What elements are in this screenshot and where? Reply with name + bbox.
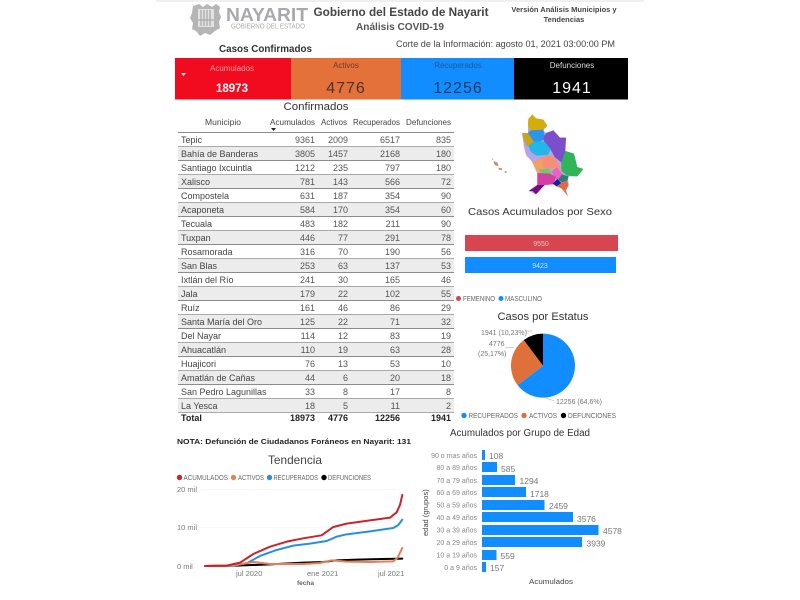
axis labels: 0 mil: [177, 562, 193, 571]
rows: 78: [441, 233, 451, 243]
rows: 354: [385, 191, 400, 201]
card: activos: [291, 58, 401, 100]
rows: Tuxpan: [181, 233, 211, 243]
rows: 12: [338, 331, 348, 341]
rows: 137: [385, 261, 400, 271]
rows: 53: [441, 261, 451, 271]
rows: 6517: [380, 135, 400, 145]
rows: 10: [441, 359, 451, 369]
logo wordmark: NAYARIT: [226, 5, 308, 25]
rows: Jala: [181, 289, 198, 299]
table: municipios: [178, 118, 454, 423]
rows: 63: [338, 261, 348, 271]
line: defunciones: [205, 559, 402, 566]
table heading: Confirmados: [284, 101, 349, 113]
rows: Santa María del Oro: [181, 317, 262, 327]
rows: 179: [300, 289, 315, 299]
rows: Tecuala: [181, 219, 212, 229]
total row: [181, 413, 451, 423]
version note: Tendencias: [544, 15, 584, 24]
rows: Ruíz: [181, 303, 200, 313]
y axis title: edad (grupos): [421, 489, 430, 536]
rows: 60: [441, 205, 451, 215]
legend: sexo: FEMENINO: [463, 294, 495, 303]
rows: 55: [441, 289, 451, 299]
rows: 28: [441, 345, 451, 355]
rows: 797: [385, 163, 400, 173]
group labels: 30 a 39 años: [437, 528, 477, 534]
group labels: 0 a 9 años: [444, 565, 477, 572]
rows: 125: [300, 317, 315, 327]
legend: estatus: [461, 411, 616, 420]
rows: Acaponeta: [181, 205, 224, 215]
rows: Huajicori: [181, 359, 216, 369]
rows: 631: [300, 191, 315, 201]
rows: 3805: [295, 149, 315, 159]
rows: 291: [385, 233, 400, 243]
rows: 19: [338, 345, 348, 355]
rows: Rosamorada: [181, 247, 233, 257]
total row: 1941: [431, 413, 451, 423]
group labels: 50 a 59 años: [437, 502, 477, 510]
pie labels: [478, 330, 602, 406]
value labels: 2459: [549, 501, 568, 511]
axis labels: 20 mil: [177, 485, 197, 494]
rows: [181, 135, 451, 411]
pie labels: 1941 (10,23%): [481, 330, 527, 337]
bar: femenino: 9550: [533, 241, 549, 248]
rows: 18: [305, 401, 315, 411]
bar chart: grupo de edad: [421, 450, 622, 586]
rows: 70: [338, 247, 348, 257]
rows: 13: [338, 359, 348, 369]
rows: 90: [441, 191, 451, 201]
legend: estatus: ACTIVOS: [529, 411, 557, 420]
value labels: 4578: [603, 526, 622, 536]
rows: Compostela: [181, 191, 229, 201]
table header: Acumulados: [270, 118, 315, 127]
card: recuperados: 12256: [433, 80, 483, 97]
rows: San Pedro Lagunillas: [181, 387, 267, 397]
x axis title: Acumulados: [529, 577, 573, 586]
line: recuperados: [205, 520, 402, 566]
top shadow strip: [156, 0, 644, 2]
rows: 114: [301, 331, 315, 341]
legend: sexo: MASCULINO: [505, 294, 542, 303]
header: [190, 4, 617, 55]
rows: 165: [385, 275, 400, 285]
value labels: 3939: [586, 538, 606, 548]
rows: 77: [338, 233, 348, 243]
subtitle: Análisis COVID-19: [356, 21, 444, 33]
axis labels: [177, 485, 404, 587]
bars: [482, 450, 598, 572]
table header: Municipio: [205, 118, 242, 127]
value labels: 1294: [520, 476, 539, 486]
axis labels: fecha: [297, 580, 314, 587]
bar: femenino: [465, 235, 618, 251]
bar chart: sexo: [456, 235, 618, 303]
rows: 2: [446, 401, 451, 411]
rows: 182: [333, 219, 348, 229]
rows: 71: [390, 317, 400, 327]
version note: Versión Análisis Municipios y: [511, 5, 617, 14]
value labels: 585: [501, 464, 515, 474]
rows: 90: [441, 219, 451, 229]
rows: 241: [300, 275, 315, 285]
card: recuperados: [401, 58, 514, 100]
axis labels: ene 2021: [307, 569, 338, 578]
heading: casos acumulados por sexo: Casos Acumulados por Sexo: [468, 206, 612, 218]
logo subtitle: GOBIERNO DEL ESTADO: [231, 24, 305, 30]
total row: 18973: [290, 413, 315, 423]
rows: 161: [300, 303, 315, 313]
card: activos: 4776: [326, 80, 366, 97]
total row: Total: [181, 413, 202, 423]
rows: 19: [441, 331, 451, 341]
icon: state coat of arms: [190, 4, 221, 36]
rows: 11: [391, 401, 400, 411]
rows: 180: [436, 163, 451, 173]
card: defunciones: [514, 58, 628, 100]
rows: 2168: [380, 149, 400, 159]
rows: 32: [441, 317, 451, 327]
group labels: 70 a 79 años: [437, 478, 477, 485]
line: activos: [205, 548, 402, 566]
group labels: 90 o mas años: [431, 453, 477, 460]
rows: 180: [436, 149, 451, 159]
group labels: 80 a 89 años: [437, 465, 477, 472]
group labels: [431, 453, 477, 572]
total row: 12256: [375, 413, 400, 423]
rows: 53: [390, 359, 400, 369]
legend: tendencia: ACTIVOS: [238, 473, 264, 482]
legend: sexo: [456, 294, 542, 303]
rows: 187: [333, 191, 348, 201]
rows: 110: [301, 345, 315, 355]
table header: Activos: [321, 118, 347, 127]
value labels: 3576: [577, 514, 596, 524]
table header: [205, 118, 451, 131]
rows: Del Nayar: [181, 331, 221, 341]
axis labels: jul 2020: [235, 569, 262, 578]
card: activos: Activos: [333, 61, 359, 70]
rows: 46: [441, 275, 451, 285]
axis labels: jul 2021: [377, 569, 404, 578]
bar: masculino: 9423: [532, 263, 548, 270]
line: acumulados: [205, 495, 402, 566]
rows: 781: [300, 177, 315, 187]
rows: Xalisco: [181, 177, 210, 187]
value labels: [489, 451, 622, 573]
pie chart: estatus: [505, 331, 575, 401]
axis labels: 10 mil: [177, 523, 197, 532]
value labels: 108: [489, 451, 503, 461]
heading: acumulados por grupo de edad: Acumulados por Grupo de Edad: [450, 428, 590, 439]
rows: 354: [385, 205, 400, 215]
total row: 4776: [328, 413, 348, 423]
card: defunciones: 1941: [552, 80, 592, 97]
rows: 483: [300, 219, 315, 229]
rows: 190: [385, 247, 400, 257]
rows: 584: [300, 205, 315, 215]
rows: 316: [300, 247, 315, 257]
rows: 566: [385, 177, 400, 187]
value labels: 1718: [530, 489, 549, 499]
card: acumulados: Acumulados: [210, 64, 254, 73]
heading: casos por estatus: Casos por Estatus: [498, 311, 589, 323]
map of Nayarit: [492, 114, 583, 196]
section heading: casos confirmados: Casos Confirmados: [219, 43, 312, 55]
rows: 835: [436, 135, 451, 145]
rows: 8: [343, 387, 348, 397]
bar: masculino: [465, 257, 616, 273]
line chart: tendencia: [177, 485, 404, 587]
rows: 44: [305, 373, 315, 383]
legend: tendencia: [177, 473, 371, 482]
rows: Amatlán de Cañas: [181, 373, 256, 383]
rows: 86: [390, 303, 400, 313]
note: NOTA: Defunción de Ciudadanos Foráneos en Nayarit: 131: [177, 437, 411, 446]
group labels: 10 a 19 años: [437, 552, 477, 560]
rows: 446: [300, 233, 315, 243]
rows: 22: [338, 289, 348, 299]
rows: 2009: [328, 135, 348, 145]
rows: 33: [305, 387, 315, 397]
card: recuperados: Recuperados: [434, 61, 482, 70]
rows: 9361: [295, 135, 315, 145]
rows: San Blas: [181, 261, 218, 271]
rows: 253: [300, 261, 315, 271]
KPI cards: [175, 58, 628, 100]
table header: Recuperados: [353, 118, 400, 127]
value labels: 157: [490, 563, 504, 573]
rows: 76: [305, 359, 315, 369]
rows: 1457: [328, 149, 348, 159]
rows: Ixtlán del Río: [181, 275, 234, 285]
rows: 170: [333, 205, 348, 215]
rows: 30: [338, 275, 348, 285]
rows: 72: [441, 177, 451, 187]
pie labels: 12256 (64,6%): [556, 399, 602, 406]
group labels: 40 a 49 años: [437, 515, 477, 522]
card: acumulados: 18973: [216, 83, 248, 95]
rows: 5: [343, 401, 348, 411]
rows: 22: [338, 317, 348, 327]
rows: 143: [333, 177, 348, 187]
legend: tendencia: RECUPERADOS: [274, 473, 318, 482]
rows: 102: [385, 289, 400, 299]
legend: estatus: RECUPERADOS: [468, 411, 518, 420]
rows: Santiago Ixcuintla: [181, 163, 252, 173]
rows: 8: [446, 387, 451, 397]
legend: estatus: DEFUNCIONES: [568, 411, 616, 420]
rows: 83: [390, 331, 400, 341]
rows: 18: [441, 373, 451, 383]
data cut-off: Corte de la Información: agosto 01, 2021 03:00:00 PM: [396, 39, 615, 49]
card: defunciones: Defunciones: [550, 61, 594, 70]
rows: La Yesca: [181, 401, 218, 411]
heading: tendencia: Tendencia: [268, 453, 322, 467]
legend: tendencia: DEFUNCIONES: [328, 473, 371, 482]
rows: 29: [441, 303, 451, 313]
title: Gobierno del Estado de Nayarit: [314, 5, 488, 19]
pie labels: (25,17%): [478, 351, 506, 358]
rows: 235: [333, 163, 348, 173]
group labels: 60 a 69 años: [437, 490, 477, 497]
pie labels: 4776: [489, 341, 505, 348]
rows: 56: [441, 247, 451, 257]
card: acumulados: [175, 58, 291, 100]
rows: 211: [386, 219, 400, 229]
rows: Tepic: [181, 135, 203, 145]
rows: 63: [390, 345, 400, 355]
value labels: 559: [500, 551, 515, 561]
rows: 6: [343, 373, 348, 383]
table header: Defunciones: [406, 118, 451, 127]
rows: 1212: [295, 163, 315, 173]
rows: 46: [338, 303, 348, 313]
group labels: 20 a 29 años: [437, 540, 477, 547]
rows: 17: [390, 387, 400, 397]
legend: tendencia: ACUMULADOS: [184, 473, 228, 482]
rows: Bahía de Banderas: [181, 149, 259, 159]
rows: Ahuacatlán: [181, 345, 226, 355]
rows: 20: [390, 373, 400, 383]
